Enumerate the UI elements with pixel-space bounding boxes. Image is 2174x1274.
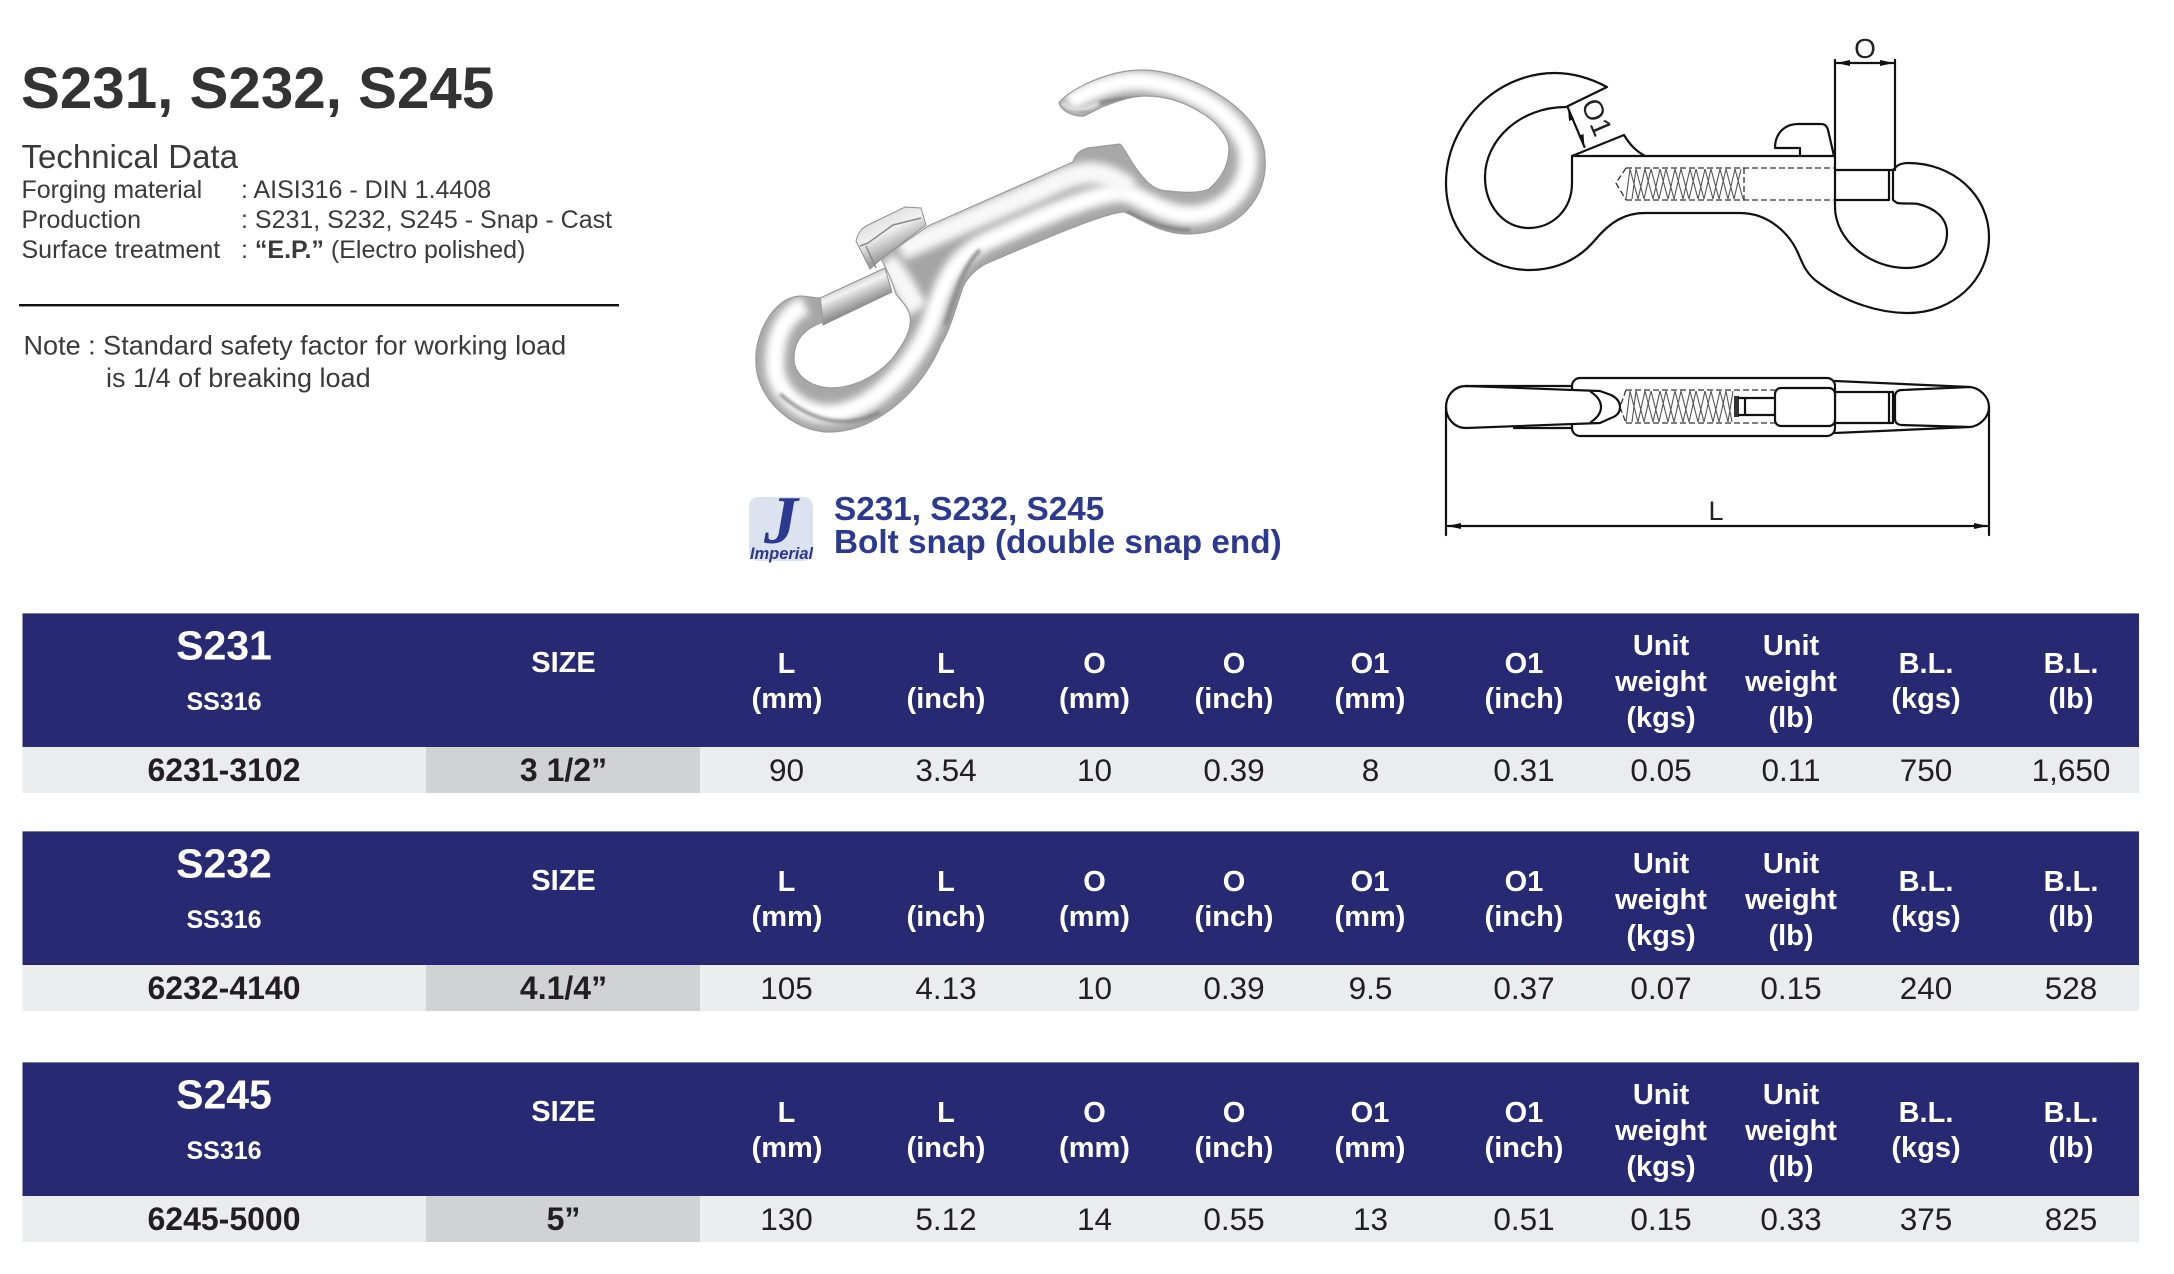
column headings bbox=[531, 1079, 2098, 1183]
column headings: SIZE bbox=[531, 1096, 596, 1128]
column headings: O bbox=[1223, 648, 1245, 680]
column headings: (kgs) bbox=[1626, 1151, 1696, 1183]
column headings: (lb) bbox=[1768, 1151, 1814, 1183]
data row: 0.39 bbox=[1203, 970, 1265, 1006]
forged body and hooks bbox=[756, 70, 1265, 432]
forging material row: : AISI316 - DIN 1.4408 bbox=[241, 176, 491, 204]
data row: 8 bbox=[1362, 752, 1379, 788]
data row: 4.1/4” bbox=[520, 970, 607, 1006]
safety note bbox=[24, 330, 566, 393]
data row: 0.07 bbox=[1630, 970, 1692, 1006]
data row: 90 bbox=[769, 752, 804, 788]
data row: 0.11 bbox=[1762, 752, 1820, 788]
dimension O bbox=[1835, 33, 1895, 170]
column headings: O1 bbox=[1505, 866, 1543, 898]
data row bbox=[22, 1196, 2139, 1242]
column headings: SIZE bbox=[531, 865, 596, 897]
forging material row: Forging material bbox=[22, 176, 202, 204]
column headings bbox=[531, 630, 2098, 734]
data row: 1,650 bbox=[2032, 752, 2110, 788]
dimension L bbox=[1446, 407, 1989, 535]
column headings: (mm) bbox=[752, 1132, 822, 1164]
technical data block bbox=[22, 138, 612, 264]
column headings: (mm) bbox=[1335, 1132, 1405, 1164]
column headings: (inch) bbox=[1485, 1132, 1563, 1164]
data row: 13 bbox=[1353, 1201, 1388, 1237]
data row: 10 bbox=[1077, 970, 1112, 1006]
model heading bbox=[176, 840, 272, 934]
column headings: (kgs) bbox=[1891, 901, 1961, 933]
column headings: B.L. bbox=[1899, 866, 1953, 898]
icon: Imperial logo bbox=[749, 482, 814, 563]
dimension O1: O1 bbox=[1575, 94, 1618, 141]
column headings: (mm) bbox=[1335, 683, 1405, 715]
pin bbox=[1835, 392, 1893, 423]
column headings: Unit bbox=[1633, 1079, 1690, 1111]
wedge lip bbox=[1572, 135, 1645, 156]
technical drawing: side view bbox=[1446, 33, 1989, 313]
column headings: (kgs) bbox=[1891, 1132, 1961, 1164]
data row: 9.5 bbox=[1349, 970, 1392, 1006]
bolt pin bbox=[820, 268, 892, 325]
column headings: (lb) bbox=[1768, 920, 1814, 952]
column headings: (inch) bbox=[1485, 901, 1563, 933]
column headings: B.L. bbox=[1899, 1097, 1953, 1129]
column headings: O bbox=[1083, 1097, 1106, 1129]
data row: 0.33 bbox=[1760, 1201, 1822, 1237]
column headings: (mm) bbox=[752, 683, 822, 715]
column headings: (kgs) bbox=[1891, 683, 1961, 715]
safety note: Note : Standard safety factor for working load bbox=[24, 330, 566, 360]
model heading: SS316 bbox=[186, 906, 262, 934]
data row: 10 bbox=[1077, 752, 1112, 788]
trigger bbox=[1775, 124, 1834, 156]
column headings: (kgs) bbox=[1626, 702, 1696, 734]
column headings: O1 bbox=[1505, 648, 1543, 680]
column headings: O bbox=[1223, 1097, 1245, 1129]
column headings: (lb) bbox=[2048, 901, 2094, 933]
safety note: is 1/4 of breaking load bbox=[106, 363, 371, 393]
model heading bbox=[176, 622, 272, 716]
data row: 240 bbox=[1900, 970, 1952, 1006]
technical data heading: Technical Data bbox=[22, 138, 239, 175]
column headings bbox=[531, 848, 2098, 952]
column headings: SIZE bbox=[531, 647, 596, 679]
column headings: O1 bbox=[1351, 648, 1389, 680]
surface treatment row: Surface treatment bbox=[22, 236, 220, 264]
data row: 6232-4140 bbox=[147, 970, 301, 1006]
column headings: O bbox=[1223, 866, 1245, 898]
column headings: (inch) bbox=[1485, 683, 1563, 715]
hidden spring chamber bbox=[1616, 168, 1835, 200]
title: S231, S232, S245 bbox=[21, 56, 494, 121]
column headings: (lb) bbox=[2048, 683, 2094, 715]
model heading: S231 bbox=[176, 622, 272, 668]
column headings: B.L. bbox=[1899, 648, 1953, 680]
spring bbox=[1626, 169, 1743, 199]
icon: Imperial logo: J bbox=[763, 482, 800, 558]
data row: 0.05 bbox=[1630, 752, 1692, 788]
data row: 130 bbox=[760, 1201, 813, 1237]
data row bbox=[22, 747, 2139, 793]
model heading: S232 bbox=[176, 840, 272, 886]
centre nut bbox=[1775, 388, 1835, 426]
column headings: L bbox=[778, 866, 795, 898]
data row: 528 bbox=[2045, 970, 2097, 1006]
column headings: weight bbox=[1744, 666, 1837, 698]
column headings: L bbox=[937, 648, 955, 680]
data row: 0.31 bbox=[1493, 752, 1555, 788]
column headings: O1 bbox=[1351, 1097, 1389, 1129]
column headings: (lb) bbox=[2048, 1132, 2094, 1164]
column headings: (mm) bbox=[1335, 901, 1405, 933]
column headings: weight bbox=[1614, 666, 1707, 698]
hidden spring chamber bbox=[1620, 390, 1775, 423]
gate trigger bbox=[856, 207, 926, 269]
data row: 0.15 bbox=[1630, 1201, 1692, 1237]
column headings: Unit bbox=[1763, 630, 1820, 662]
column headings: L bbox=[778, 648, 795, 680]
snap outline bbox=[1446, 73, 1989, 313]
icon: Imperial logo: Imperial bbox=[750, 545, 814, 563]
column headings: O1 bbox=[1505, 1097, 1543, 1129]
column headings: (kgs) bbox=[1626, 920, 1696, 952]
column headings: (inch) bbox=[907, 1132, 985, 1164]
column headings: (mm) bbox=[1059, 901, 1130, 933]
data row: 375 bbox=[1900, 1201, 1952, 1237]
header band bbox=[22, 1062, 2139, 1196]
data row: 14 bbox=[1077, 1201, 1112, 1237]
model heading bbox=[176, 1072, 272, 1165]
inner plunger bbox=[1734, 396, 1739, 417]
column headings: (inch) bbox=[1195, 901, 1273, 933]
data row: 105 bbox=[760, 970, 813, 1006]
surface treatment row bbox=[22, 236, 525, 264]
data row bbox=[22, 965, 2139, 1011]
column headings: (mm) bbox=[1059, 683, 1130, 715]
column headings: (inch) bbox=[907, 683, 985, 715]
data row: 0.37 bbox=[1493, 970, 1555, 1006]
data row: 0.15 bbox=[1760, 970, 1822, 1006]
production row bbox=[22, 206, 612, 234]
column headings: Unit bbox=[1763, 848, 1820, 880]
column headings: Unit bbox=[1633, 848, 1690, 880]
model heading: S245 bbox=[176, 1072, 272, 1118]
column headings: L bbox=[937, 1097, 955, 1129]
technical drawing: top view bbox=[1446, 378, 1989, 535]
dimension L: L bbox=[1708, 496, 1724, 526]
column headings: B.L. bbox=[2044, 866, 2098, 898]
product name caption: Bolt snap (double snap end) bbox=[834, 524, 1282, 561]
data row: 0.55 bbox=[1203, 1201, 1265, 1237]
header band bbox=[22, 831, 2139, 965]
column headings: (lb) bbox=[1768, 702, 1814, 734]
column headings: O1 bbox=[1351, 866, 1389, 898]
product name caption bbox=[834, 491, 1282, 561]
forging material row bbox=[22, 176, 491, 204]
data row: 6245-5000 bbox=[147, 1201, 301, 1237]
data row: 0.51 bbox=[1493, 1201, 1555, 1237]
data row: 3 1/2” bbox=[520, 752, 607, 788]
left jaw bbox=[1446, 386, 1620, 428]
column headings: (inch) bbox=[1195, 1132, 1273, 1164]
column headings: B.L. bbox=[2044, 648, 2098, 680]
dimension O: O bbox=[1854, 33, 1876, 64]
data row: 5” bbox=[547, 1201, 580, 1237]
production row: Production bbox=[22, 206, 141, 234]
column headings: Unit bbox=[1633, 630, 1690, 662]
data row: 4.13 bbox=[915, 970, 977, 1006]
data row: 750 bbox=[1900, 752, 1952, 788]
table: S231 bbox=[22, 613, 2139, 793]
table: S245 bbox=[22, 1062, 2139, 1242]
column headings: weight bbox=[1744, 884, 1837, 916]
data row: 0.39 bbox=[1203, 752, 1265, 788]
product name caption: S231, S232, S245 bbox=[834, 491, 1104, 528]
right jaw bbox=[1835, 381, 1989, 433]
column headings: weight bbox=[1744, 1115, 1837, 1147]
column headings: L bbox=[778, 1097, 795, 1129]
data row: 5.12 bbox=[915, 1201, 977, 1237]
data row: 3.54 bbox=[915, 752, 977, 788]
data row: 6231-3102 bbox=[147, 752, 301, 788]
column headings: (mm) bbox=[1059, 1132, 1130, 1164]
column headings: L bbox=[937, 866, 955, 898]
product photo: bolt snap bbox=[740, 60, 1280, 440]
column headings: (inch) bbox=[1195, 683, 1273, 715]
table: S232 bbox=[22, 831, 2139, 1011]
column headings: Unit bbox=[1763, 1079, 1820, 1111]
spring bbox=[1626, 391, 1733, 422]
model heading: SS316 bbox=[186, 1137, 262, 1165]
column headings: B.L. bbox=[2044, 1097, 2098, 1129]
column headings: (mm) bbox=[752, 901, 822, 933]
surface treatment row: : “E.P.” (Electro polished) bbox=[241, 236, 525, 264]
data row: 825 bbox=[2045, 1201, 2097, 1237]
column headings: (inch) bbox=[907, 901, 985, 933]
model heading: SS316 bbox=[186, 688, 262, 716]
header band bbox=[22, 613, 2139, 747]
column headings: weight bbox=[1614, 1115, 1707, 1147]
body bbox=[1572, 378, 1835, 436]
pin bbox=[1835, 170, 1893, 200]
production row: : S231, S232, S245 - Snap - Cast bbox=[241, 206, 612, 234]
column headings: O bbox=[1083, 866, 1106, 898]
column headings: weight bbox=[1614, 884, 1707, 916]
column headings: O bbox=[1083, 648, 1106, 680]
